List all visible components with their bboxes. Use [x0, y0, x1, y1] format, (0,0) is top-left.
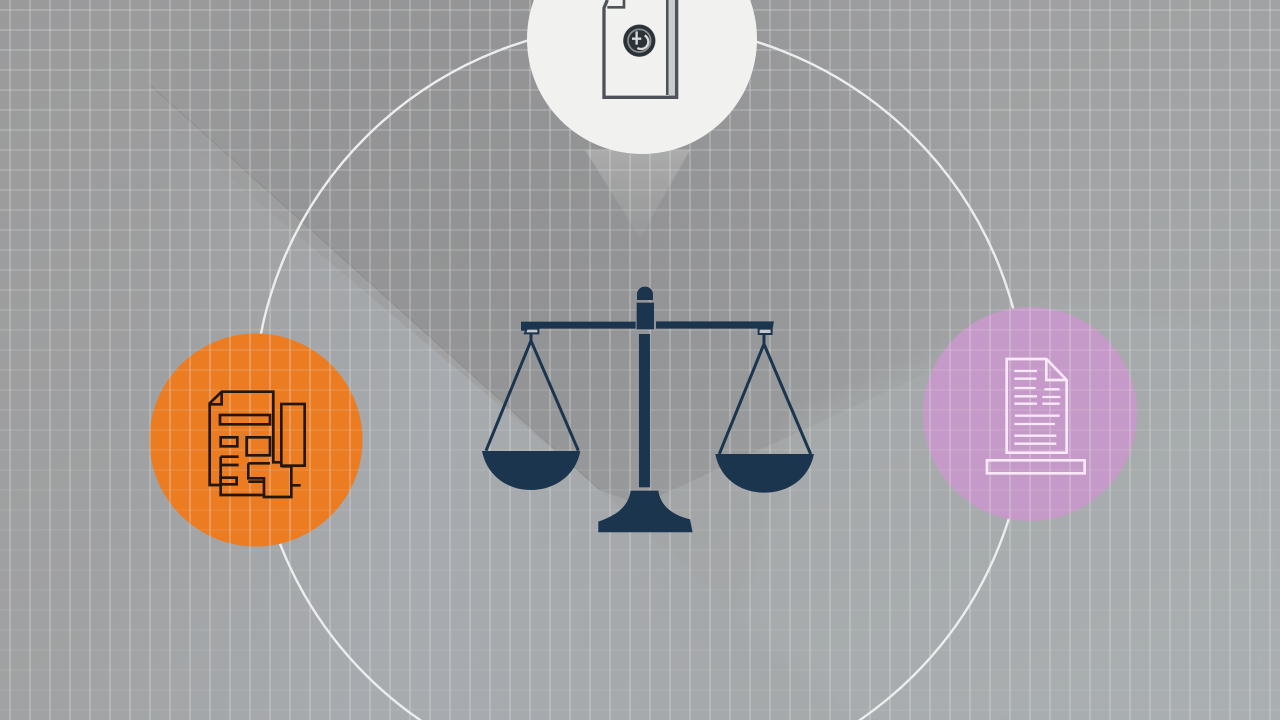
purple circle [923, 307, 1137, 521]
left pan [482, 451, 580, 490]
background shape: lighter lower-left wedge [326, 264, 549, 684]
left chains [486, 333, 578, 451]
icon: coin [623, 25, 655, 57]
right chains [719, 333, 811, 454]
large ring [254, 24, 1026, 720]
icon: paper on a base [987, 359, 1085, 473]
orange circle [150, 334, 362, 546]
column head [637, 303, 654, 329]
white circle [527, 0, 757, 154]
background shape: light cone under white circle [585, 150, 690, 238]
right pan [715, 454, 814, 493]
stem [639, 334, 650, 487]
finial [637, 287, 653, 300]
base [598, 491, 693, 532]
hangers [525, 329, 538, 333]
icon: balance scale [482, 287, 814, 532]
icon: stacked forms [210, 392, 305, 497]
background shape: dark central wedge [274, 0, 852, 500]
background shape: lighter lower-right band [740, 300, 1280, 720]
background shape: fold line [150, 85, 600, 490]
beam [521, 322, 636, 331]
icon: document with coin seal [604, 0, 677, 97]
